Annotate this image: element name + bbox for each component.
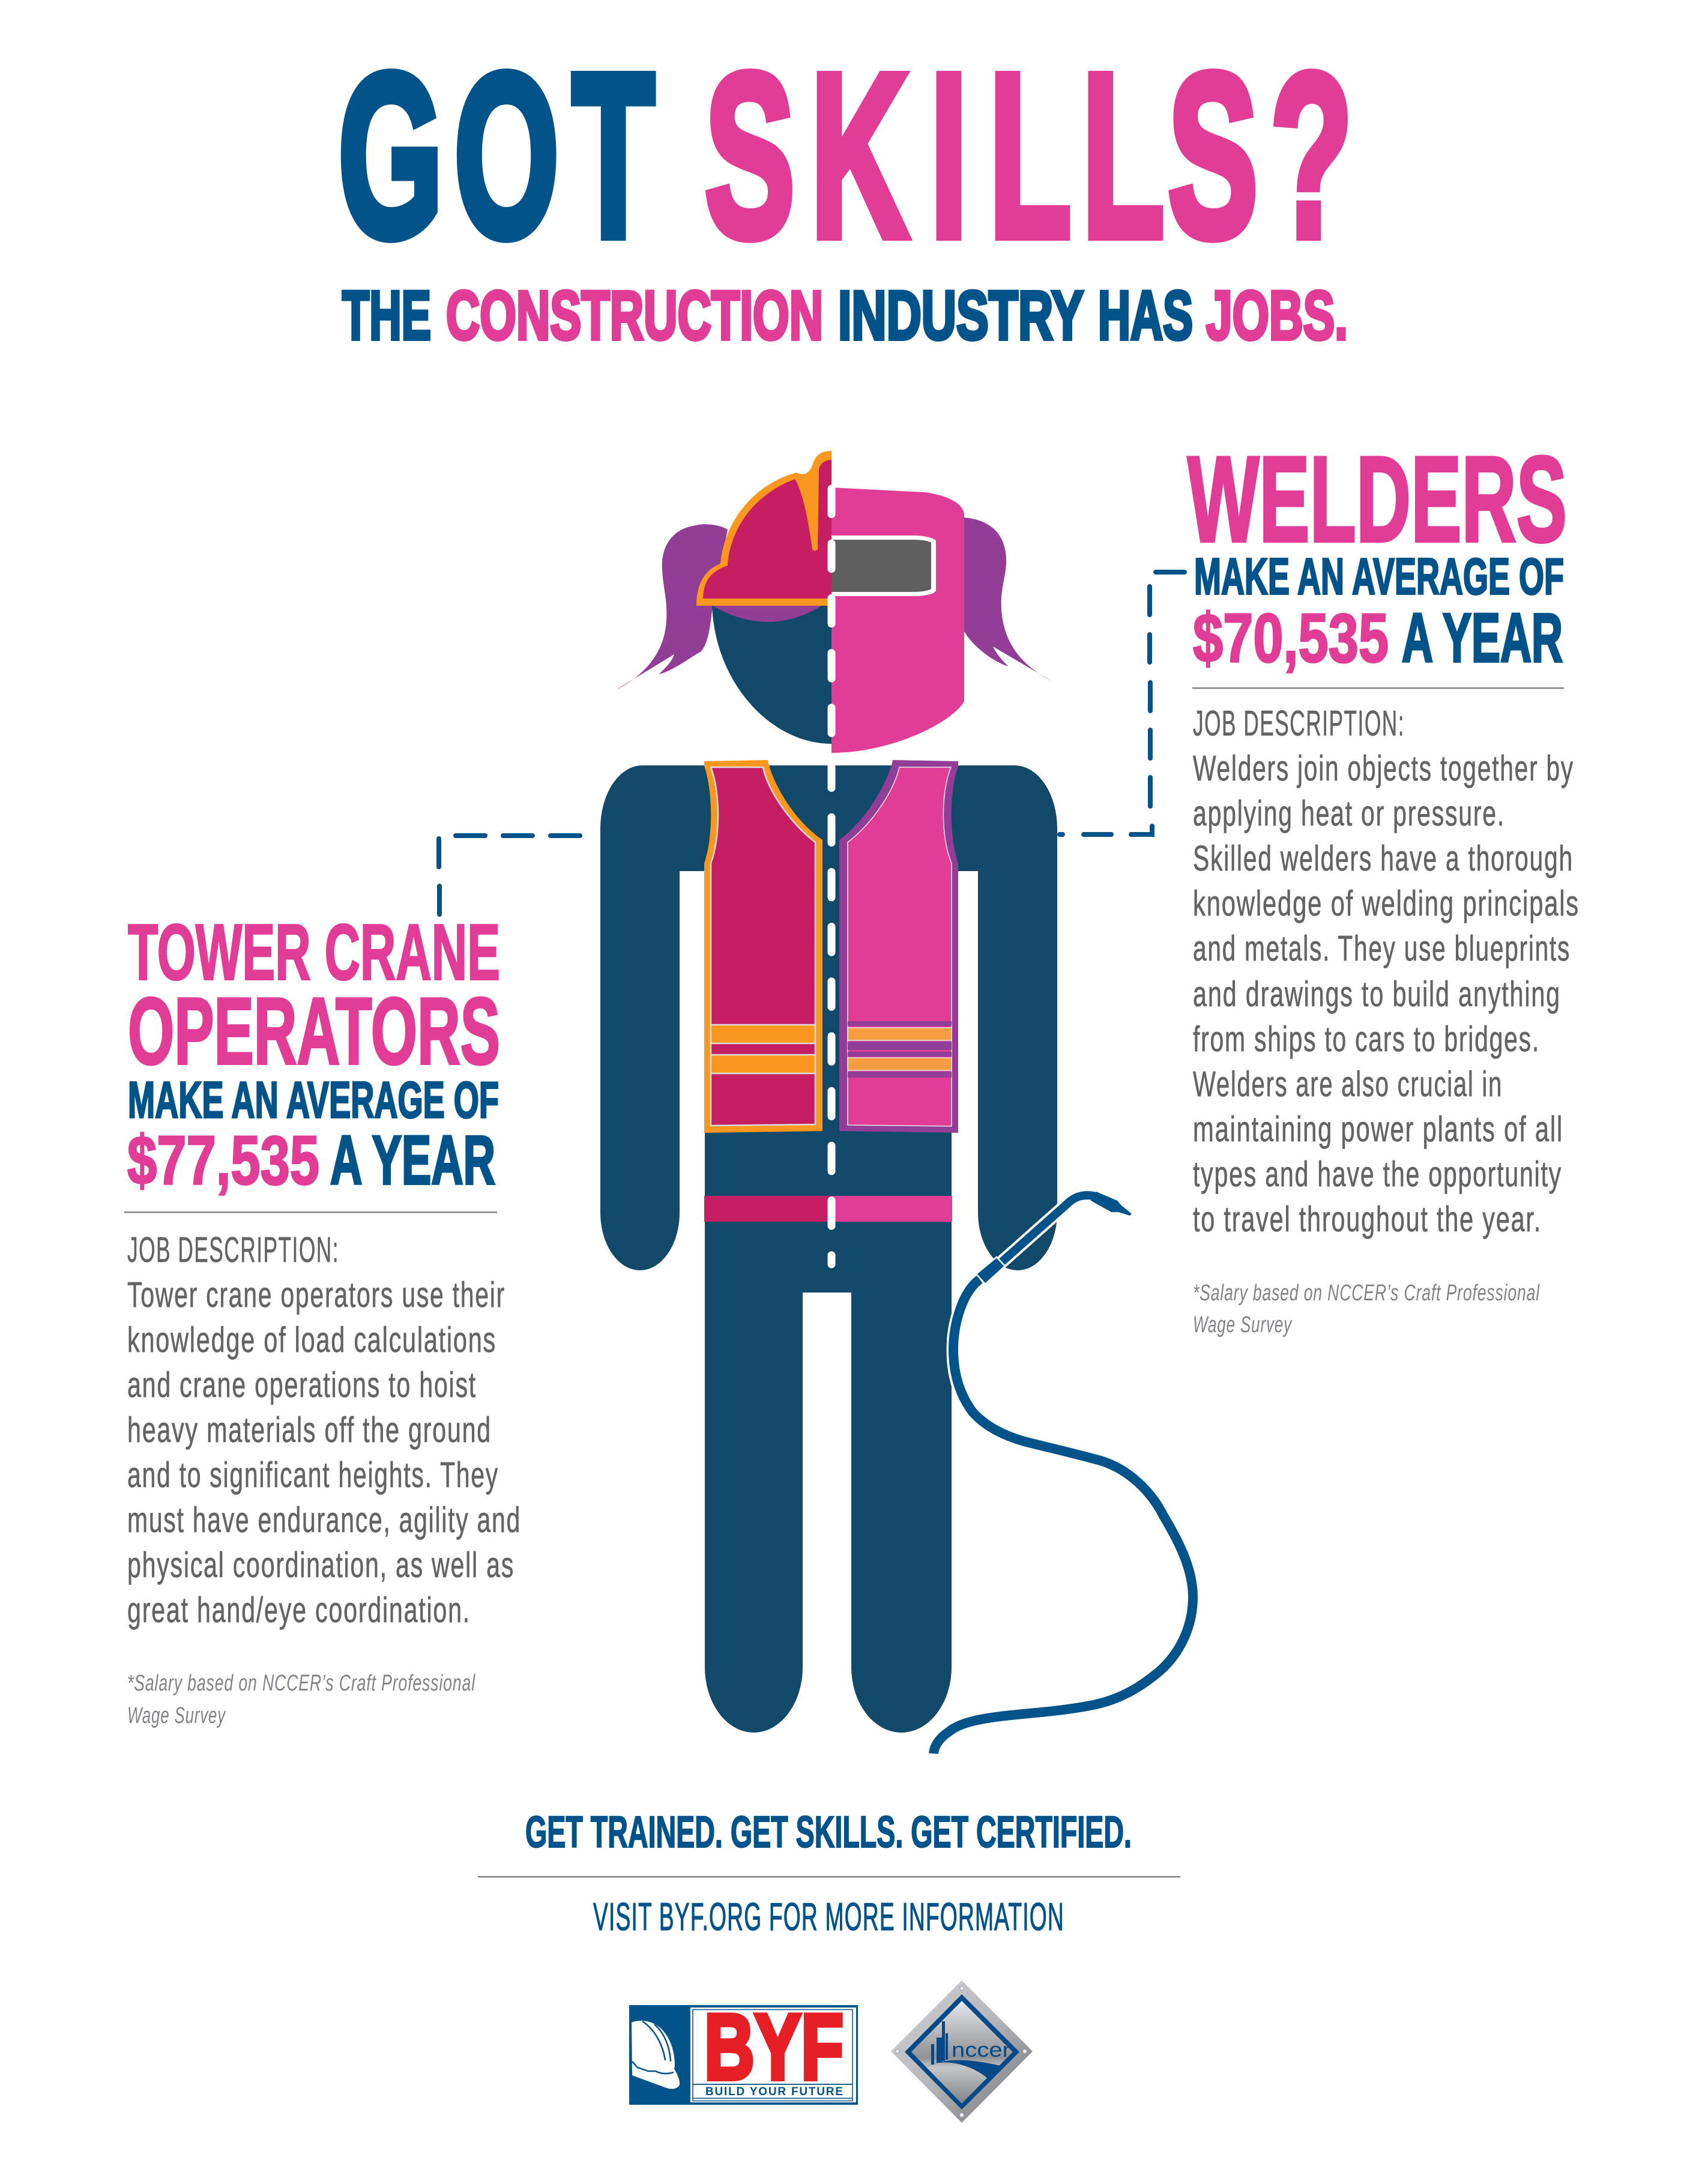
logo: BYF build your future: BUILD YOUR FUTURE	[705, 2086, 843, 2098]
logo: NCCER diamond	[891, 1980, 1033, 2123]
salary text: $70,535	[1193, 600, 1389, 677]
salary footnote	[1193, 1281, 1540, 1338]
center dashed divider	[827, 489, 836, 1264]
title: Got Skills?: SKILLS?	[705, 26, 1353, 286]
job description text: JOB DESCRIPTION:	[127, 1230, 339, 1270]
salary text	[127, 1072, 499, 1199]
right pigtail	[964, 517, 1052, 681]
heading: tower crane operators: TOWER CRANE	[128, 908, 500, 997]
job description text: and drawings to build anything	[1193, 974, 1561, 1014]
call to action: visit byf.org: VISIT BYF.ORG FOR MORE INFORMATION	[593, 1895, 1064, 1938]
logo: BYF build your future	[629, 1995, 858, 2105]
heading: tower crane operators: OPERATORS	[128, 979, 500, 1084]
connector: dashed line to welders	[1060, 572, 1184, 834]
job description text: Welders are also crucial in	[1193, 1064, 1503, 1104]
head	[712, 600, 831, 744]
subtitle: the construction industry has jobs: JOBS.	[1206, 277, 1348, 354]
job description text: must have endurance, agility and	[127, 1500, 521, 1540]
salary footnote: *Salary based on NCCER’s Craft Professional	[1193, 1281, 1540, 1306]
job description text: to travel throughout the year.	[1193, 1199, 1542, 1239]
body silhouette	[600, 765, 1057, 1733]
hard hat	[696, 451, 831, 606]
salary text: $77,535	[127, 1123, 319, 1199]
job description text: and to significant heights. They	[127, 1455, 499, 1495]
logo: NCCER diamond: nccer	[952, 2039, 1010, 2062]
logo: BYF build your future: BYF	[704, 1995, 843, 2099]
job description text: applying heat or pressure.	[1193, 794, 1505, 833]
subtitle: the construction industry has jobs: CONSTRUCTION	[446, 277, 823, 354]
job description text: maintaining power plants of all	[1193, 1109, 1563, 1149]
job description text	[1193, 704, 1580, 1239]
job description text: knowledge of load calculations	[127, 1320, 496, 1360]
salary footnote: *Salary based on NCCER’s Craft Professional	[127, 1671, 475, 1696]
job description text: from ships to cars to bridges.	[1193, 1019, 1540, 1059]
panel: welders	[1187, 431, 1580, 1338]
salary text	[1193, 549, 1564, 677]
job description text: and crane operations to hoist	[127, 1365, 477, 1405]
connector: dashed line to tower crane operators	[439, 836, 580, 914]
left pigtail	[616, 524, 728, 690]
title: Got Skills?: GOT	[338, 26, 699, 286]
job description text: Tower crane operators use their	[127, 1275, 505, 1315]
salary text: MAKE AN AVERAGE OF	[128, 1072, 499, 1129]
subtitle: the construction industry has jobs: THE	[342, 277, 431, 354]
job description text: great hand/eye coordination.	[127, 1590, 471, 1630]
welding torch and hose	[934, 1192, 1193, 1754]
belt	[704, 1196, 952, 1222]
heading: tower crane operators	[128, 908, 500, 1084]
call to action: get trained: GET TRAINED. GET SKILLS. GET CERTIFIED.	[525, 1807, 1132, 1857]
salary footnote: Wage Survey	[127, 1703, 226, 1728]
salary footnote	[127, 1671, 475, 1728]
job description text: physical coordination, as well as	[127, 1545, 515, 1585]
left safety vest	[704, 760, 822, 1133]
subtitle: the construction industry has jobs: HAS	[1098, 277, 1193, 354]
salary text: A YEAR	[330, 1122, 495, 1199]
salary text: A YEAR	[1402, 600, 1563, 677]
figure: worker half crane operator half welder	[600, 451, 1193, 1754]
job description text: heavy materials off the ground	[127, 1410, 492, 1450]
icon: hard hat	[632, 2021, 680, 2089]
job description text: JOB DESCRIPTION:	[1193, 704, 1405, 743]
hair band under helmet	[713, 603, 831, 622]
panel: tower crane operators	[124, 908, 521, 1728]
right safety vest	[839, 760, 958, 1133]
rivets	[896, 1986, 1027, 2117]
mask visor	[831, 535, 936, 596]
welding mask	[831, 487, 964, 753]
salary footnote: Wage Survey	[1193, 1312, 1293, 1338]
subtitle: the construction industry has jobs: INDUSTRY	[838, 277, 1084, 354]
job description text	[127, 1230, 521, 1630]
subtitle: the construction industry has jobs	[342, 277, 1348, 354]
title: Got Skills?	[338, 26, 1353, 286]
job description text: types and have the opportunity	[1193, 1154, 1562, 1194]
